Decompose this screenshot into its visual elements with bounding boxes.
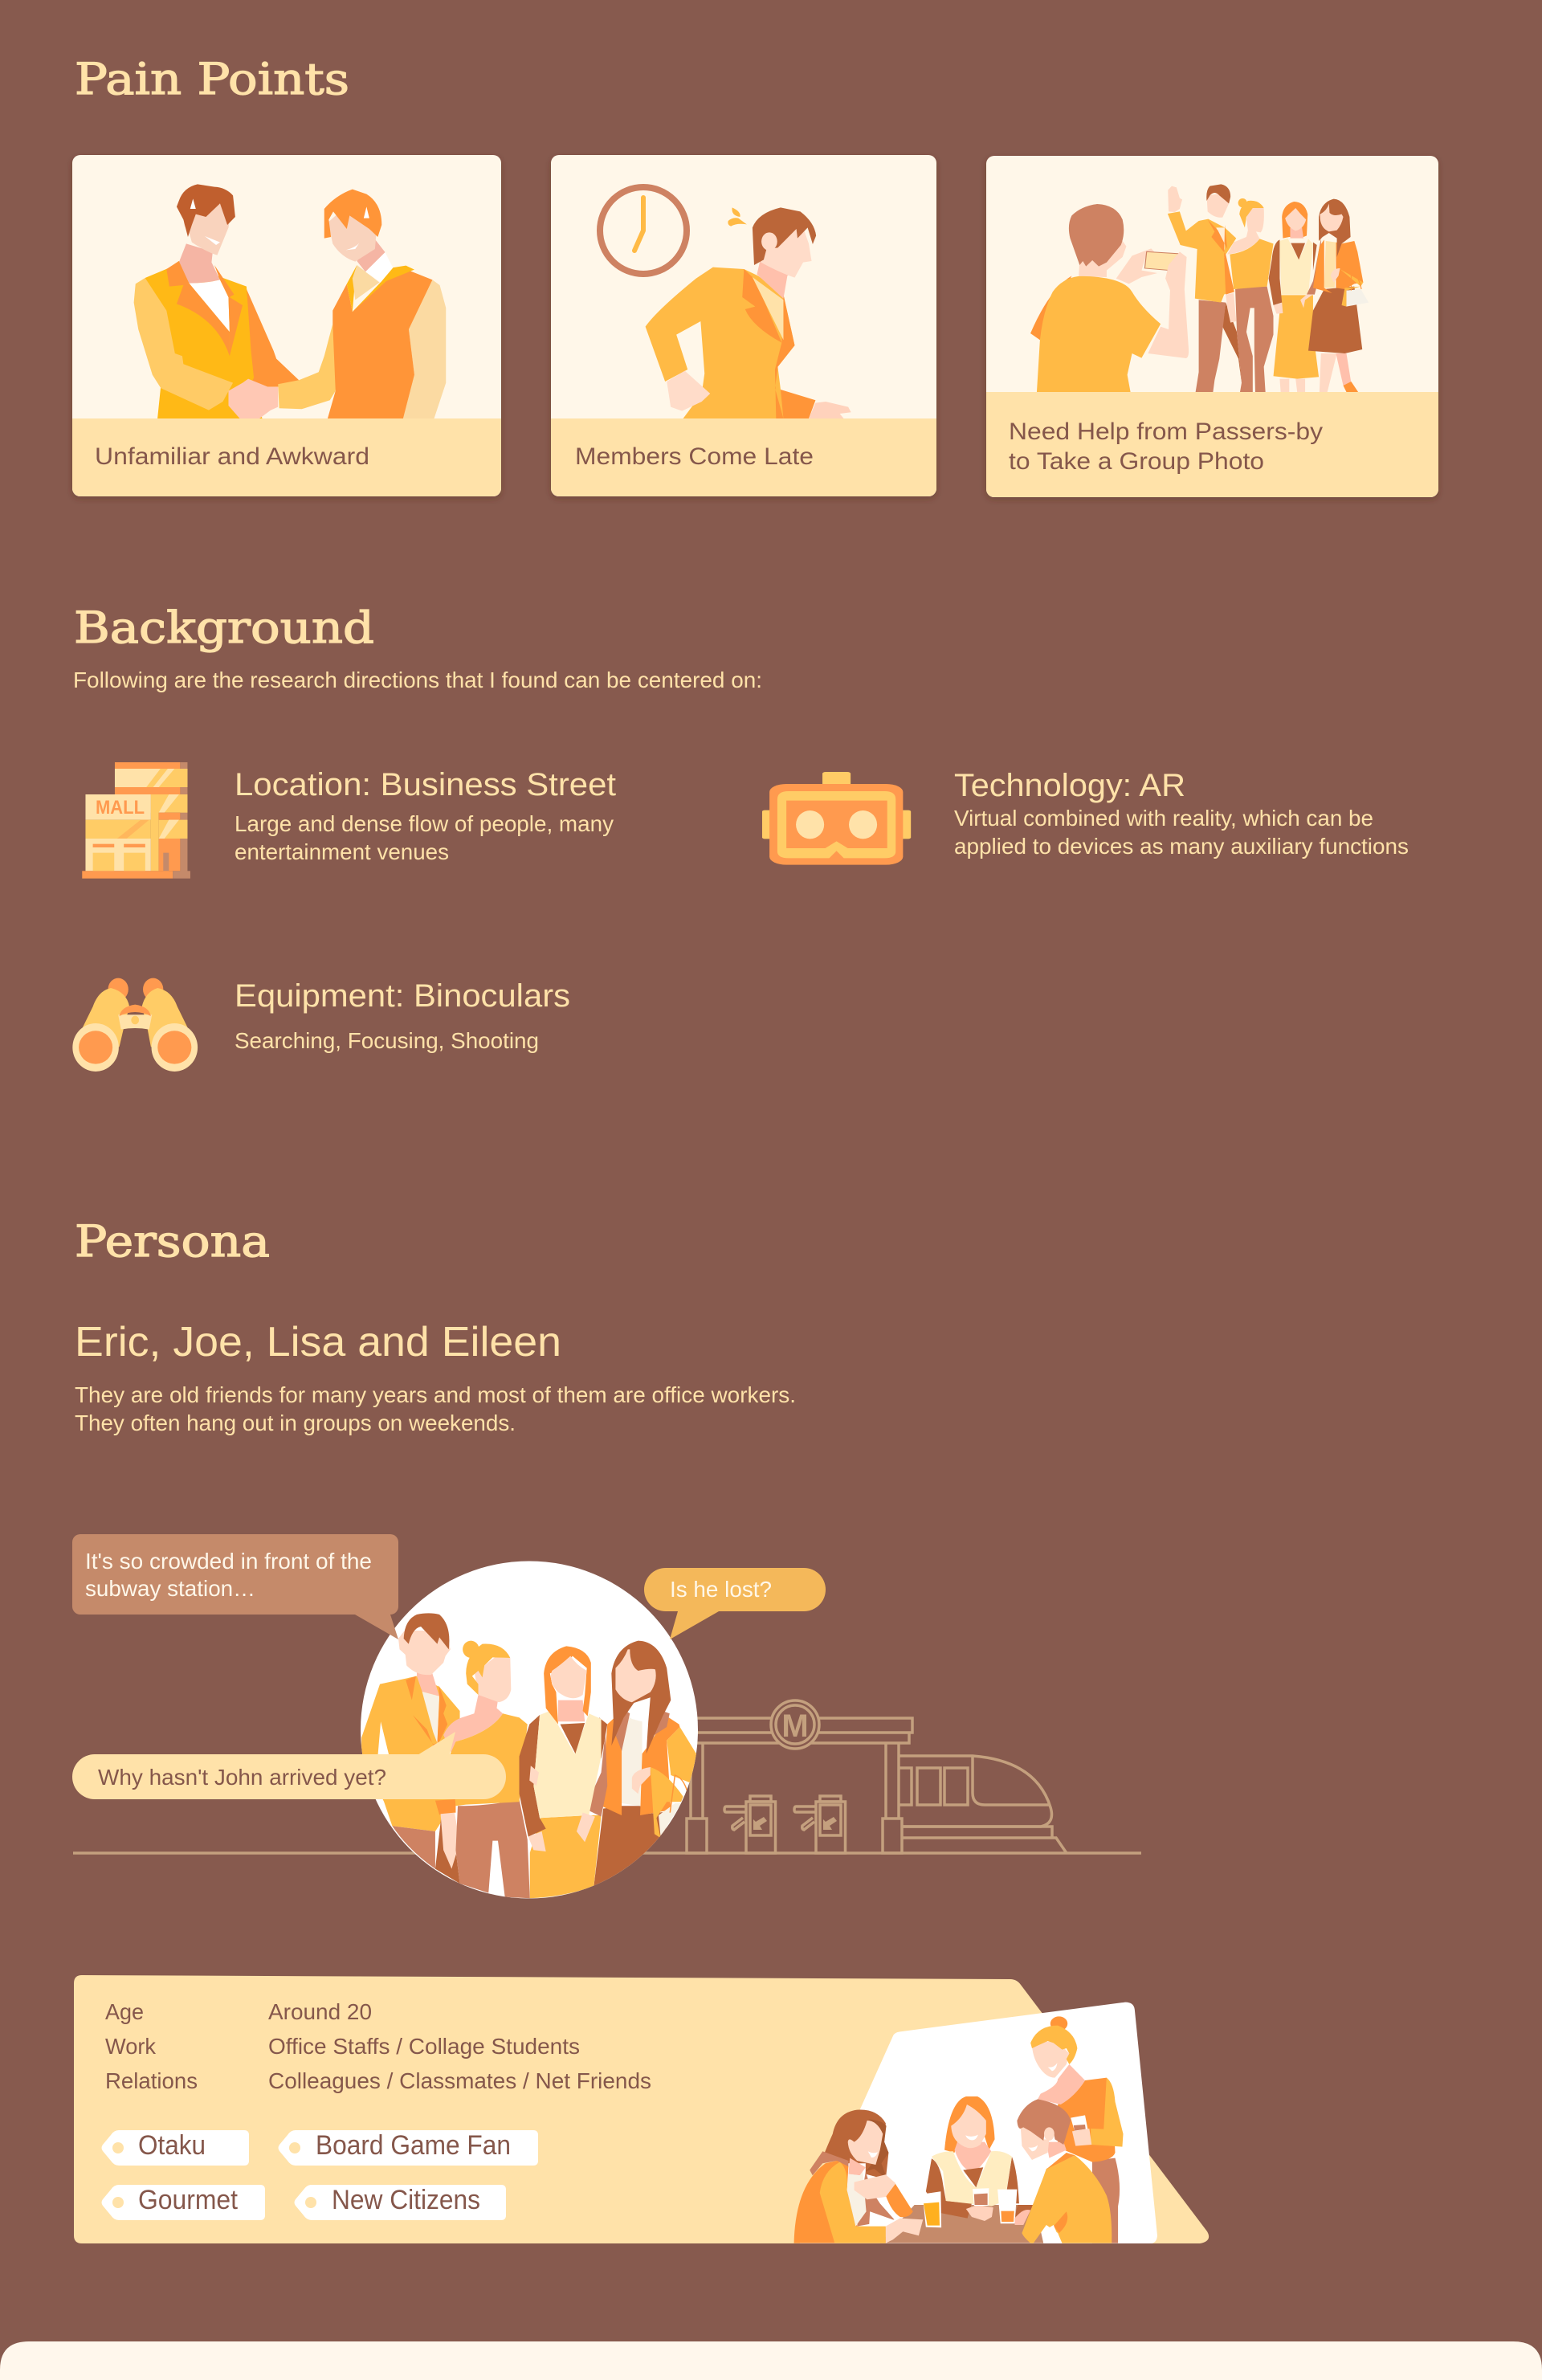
- speech bubble: Is he lost?: [644, 1568, 826, 1639]
- heading: Persona: Persona: [75, 1216, 270, 1267]
- profile attributes: Office Staffs / Collage Students: [268, 2034, 580, 2059]
- caption text: Members Come Late: [575, 443, 814, 470]
- white photo frame: [800, 2002, 1157, 2243]
- figure: Joe: [443, 1641, 530, 1898]
- speech bubble: Why hasn't John arrived yet?: Why hasn't John arrived yet?: [98, 1765, 386, 1790]
- profile attributes: Work: [105, 2034, 157, 2059]
- caption band: [551, 418, 936, 496]
- tag: Board Game Fan: [278, 2130, 538, 2166]
- caption text: Need Help from Passers-by: [1009, 418, 1323, 445]
- speech bubble: Is he lost?: Is he lost?: [670, 1577, 772, 1602]
- persona description: They often hang out in groups on weekends.: [75, 1410, 516, 1435]
- tag: Board Game Fan: Board Game Fan: [316, 2130, 511, 2161]
- block: Technology: applied to devices as many auxiliary functions: [954, 834, 1409, 859]
- tag: Otaku: [101, 2130, 249, 2166]
- tag: Gourmet: [101, 2185, 265, 2220]
- intro text: Following are the research directions that I found can be centered on:: [73, 667, 762, 692]
- figure: Eric: [361, 1613, 460, 1884]
- tag: New Citizens: [294, 2185, 506, 2220]
- heading: Background: Background: [74, 602, 374, 653]
- icon: binoculars: [72, 978, 198, 1072]
- block: Technology: Technology: AR: [954, 768, 1185, 803]
- profile attributes: Colleagues / Classmates / Net Friends: [268, 2068, 651, 2093]
- panel: persona profile card: [74, 1975, 1209, 2243]
- illustration: taking a group photo: [1030, 184, 1369, 392]
- block: Equipment: [235, 978, 570, 1053]
- tag: New Citizens: New Citizens: [332, 2185, 480, 2215]
- table: [880, 2205, 1043, 2243]
- panel: Members Come Late: [551, 155, 936, 496]
- icon: mall building: [82, 762, 190, 879]
- caption band: [986, 392, 1438, 497]
- figure: centre woman: [923, 2096, 1034, 2227]
- persona description: They are old friends for many years and most of them are office workers.: [75, 1382, 796, 1407]
- station sign letter: M: [781, 1708, 809, 1744]
- block: Technology: [954, 768, 1409, 859]
- profile attributes: Around 20: [268, 1999, 372, 2024]
- caption text: [1009, 418, 1323, 475]
- persona circle with friends: [361, 1561, 700, 1899]
- illustration: subway station line art: [73, 1700, 1141, 1853]
- figure: woman on left: [794, 2110, 923, 2243]
- caption text: to Take a Group Photo: [1009, 448, 1264, 475]
- panel: Need Help from Passers-by: [986, 156, 1438, 497]
- illustration: friends at a table: [794, 2002, 1157, 2243]
- tag: Gourmet: Gourmet: [138, 2185, 239, 2215]
- block: Technology: Virtual combined with reality, which can be: [954, 806, 1373, 831]
- speech bubble: crowded: [72, 1534, 398, 1639]
- tag: Otaku: Otaku: [138, 2130, 206, 2161]
- speech bubble: crowded: subway station…: [85, 1576, 255, 1601]
- icon: AR headset: [762, 772, 911, 865]
- block: Location: entertainment venues: [235, 839, 449, 864]
- illustration: clock and late person: [600, 187, 851, 418]
- speech bubble: crowded: It's so crowded in front of the: [85, 1549, 372, 1574]
- block: Equipment: Searching, Focusing, Shooting: [235, 1028, 539, 1053]
- figure: Lisa: [520, 1646, 607, 1898]
- illustration: handshake: [134, 184, 446, 418]
- caption text: Unfamiliar and Awkward: [95, 443, 369, 470]
- persona name: Eric, Joe, Lisa and Eileen: [75, 1319, 561, 1366]
- panel: Unfamiliar and Awkward: [72, 155, 501, 496]
- figure: Eileen: [594, 1641, 700, 1886]
- profile attributes: Age: [105, 1999, 144, 2024]
- next section panel edge: [0, 2341, 1542, 2380]
- persona description: [75, 1382, 796, 1435]
- figure: standing woman: [1030, 2016, 1124, 2243]
- speech bubble: Why hasn't John arrived yet?: [72, 1732, 506, 1799]
- caption band: [72, 418, 501, 496]
- profile attributes: [105, 1999, 651, 2093]
- sign text: MALL: MALL: [96, 797, 145, 819]
- figure: man in front: [1017, 2099, 1112, 2243]
- block: Equipment: Equipment: Binoculars: [235, 978, 570, 1014]
- block: Location: Location: Business Street: [235, 767, 616, 802]
- block: Location: [235, 767, 616, 864]
- heading: Pain Points: Pain Points: [75, 54, 349, 104]
- block: Location: Large and dense flow of people, many: [235, 811, 614, 836]
- profile attributes: Relations: [105, 2068, 198, 2093]
